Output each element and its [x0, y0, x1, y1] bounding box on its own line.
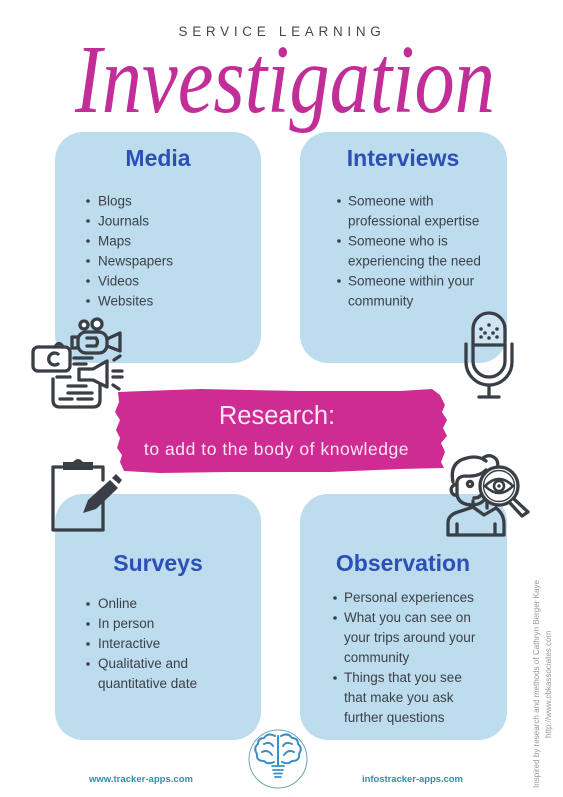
- list: surveys: [86, 596, 197, 691]
- list: media: Websites: [98, 294, 154, 308]
- list: interviews: Someone within your: [348, 274, 475, 288]
- footer: email: infostracker-apps.com: [362, 774, 463, 785]
- list: media: Blogs: [98, 194, 132, 208]
- credit: rotated attribution: http://www.cbkassociates.com: [544, 630, 553, 738]
- list: observation: What you can see on: [344, 610, 471, 625]
- footer: website: www.tracker-apps.com: [88, 774, 193, 785]
- heading: interviews: Interviews: [347, 145, 459, 171]
- banner heading: Research:: [219, 402, 335, 430]
- list: interviews: Someone with: [348, 194, 434, 208]
- list: surveys: quantitative date: [98, 676, 197, 691]
- list: media: Journals: [98, 214, 149, 228]
- panel: media: [55, 132, 261, 363]
- list: observation: [333, 590, 476, 725]
- icon: person with magnifying glass: [448, 456, 528, 535]
- list: observation: community: [344, 650, 410, 665]
- credit: rotated attribution: [532, 579, 553, 788]
- list: surveys: Interactive: [98, 636, 160, 651]
- list: interviews: Someone who is: [348, 234, 448, 248]
- list: media: Maps: [98, 234, 131, 248]
- subtitle: SERVICE LEARNING: [178, 24, 386, 39]
- credit: rotated attribution: Inspired by research and methods of Cathryn Berger Kaye: [532, 579, 541, 788]
- list: observation: Personal experiences: [344, 590, 474, 605]
- panel: interviews: [300, 132, 507, 363]
- list: surveys: Online: [98, 596, 137, 611]
- icon: media devices: [33, 319, 122, 407]
- list: media: Newspapers: [98, 254, 173, 268]
- heading: observation: Observation: [336, 550, 470, 576]
- heading: media: Media: [125, 145, 191, 171]
- list: observation: further questions: [344, 710, 445, 725]
- list: interviews: professional expertise: [348, 214, 479, 228]
- list: interviews: [337, 194, 481, 308]
- list: interviews: experiencing the need: [348, 254, 481, 268]
- banner subheading: to add to the body of knowledge: [144, 439, 409, 459]
- list: interviews: community: [348, 294, 414, 308]
- icon: clipboard and pencil: [53, 459, 122, 530]
- icon: microphone: [466, 313, 512, 397]
- panel: surveys: [55, 494, 261, 740]
- banner: research: [115, 389, 447, 473]
- icon: brain lightbulb logo: [249, 730, 307, 788]
- list: media: [86, 194, 173, 308]
- list: media: Videos: [98, 274, 139, 288]
- list: observation: that make you ask: [344, 690, 454, 705]
- heading: surveys: Surveys: [113, 550, 203, 576]
- list: surveys: Qualitative and: [98, 656, 188, 671]
- list: surveys: In person: [98, 616, 154, 631]
- list: observation: your trips around your: [344, 630, 476, 645]
- panel: observation: [300, 494, 507, 740]
- list: observation: Things that you see: [344, 670, 462, 685]
